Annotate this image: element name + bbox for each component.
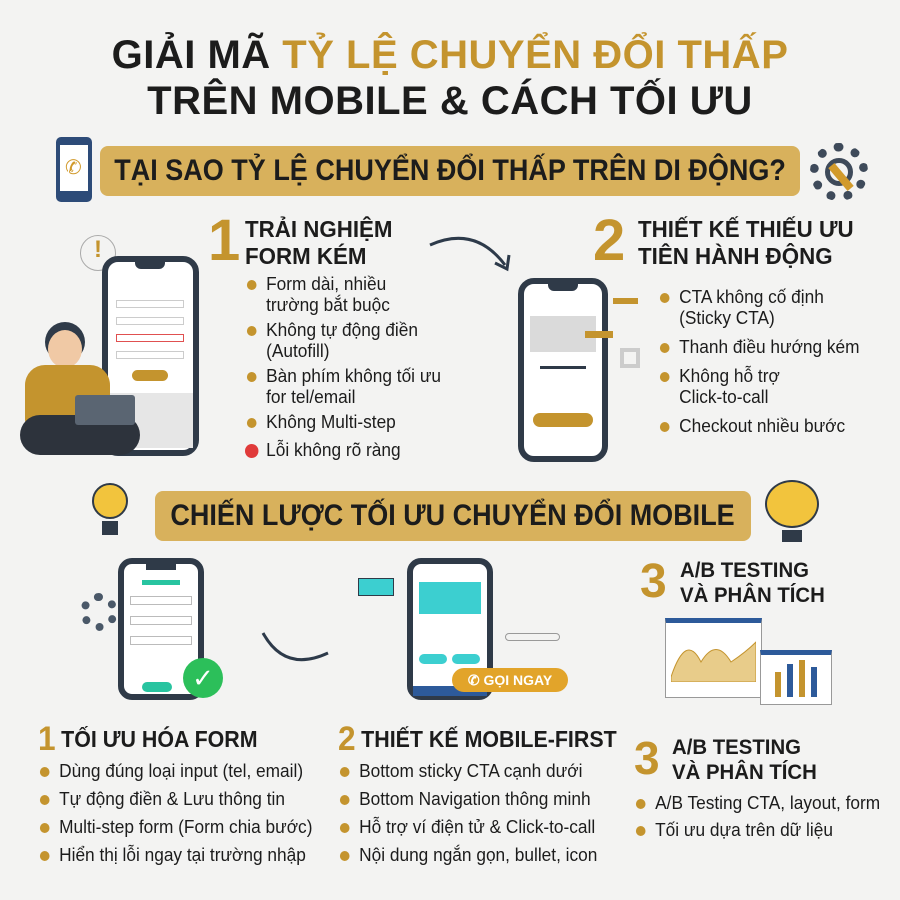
col1: form optimize [38,720,312,865]
list: form problems: Form dài, nhiều [266,274,386,294]
list: design problems: Checkout nhiều bước [679,416,845,436]
heading: A/B top: 3 [640,555,667,608]
col1: form optimize: 1TỐI ƯU HÓA FORM [38,720,258,758]
arrow [262,632,329,662]
section 2 heading: THIẾT KẾ THIẾU ƯU [638,216,854,242]
list: form problems: Không Multi-step [266,412,396,432]
section 1 heading: FORM KÉM [245,243,366,269]
section 2 heading: TIÊN HÀNH ĐỘNG [638,243,833,269]
illustration: phone with arrows [518,278,640,462]
banner: strategy: CHIẾN LƯỢC TỐI ƯU CHUYỂN ĐỔI MOBILE [171,499,735,532]
col2: mobile-first: 2THIẾT KẾ MOBILE-FIRST [338,720,617,758]
banner: why: TẠI SAO TỶ LỆ CHUYỂN ĐỔI THẤP TRÊN DI ĐỘNG? [114,154,786,187]
col3: A/B testing: A/B TESTING [672,736,801,759]
list: design problems: (Sticky CTA) [679,308,775,328]
icon: gear [810,143,868,201]
heading: A/B top [640,555,825,608]
col3: A/B testing: VÀ PHÂN TÍCH [672,761,817,784]
col3: A/B testing: Tối ưu dựa trên dữ liệu [655,820,833,840]
list: form problems: Bàn phím không tối ưu [266,366,441,386]
section 1 heading: TRẢI NGHIỆM [245,216,393,242]
title: GIẢI MÃ TỶ LỆ CHUYỂN ĐỔI THẤP [112,33,788,77]
arrow: curved [429,236,510,272]
icon: bulb right [765,480,819,542]
col1: form optimize: Tự động điền & Lưu thông tin [59,789,285,809]
col1: form optimize: Multi-step form (Form chia bước) [59,817,312,837]
col2: mobile-first: Bottom Navigation thông minh [359,789,591,809]
banner: why [100,146,800,196]
section 2 heading [593,208,854,273]
heading: A/B top: A/B TESTING [680,559,809,582]
icon: bulb left [92,483,128,535]
col2: mobile-first [338,720,617,865]
chart: dashboards [665,618,832,705]
illustration: mobile-first phone with call button: ✆ GỌI NGAY [468,672,552,688]
list: form problems: for tel/email [266,387,355,407]
col1: form optimize: Hiển thị lỗi ngay tại trường nhập [59,845,306,865]
heading: A/B top: VÀ PHÂN TÍCH [680,584,825,607]
illustration: phone form & person: ! [94,236,102,263]
title [112,32,788,123]
list: form problems: trường bắt buộc [266,295,390,315]
list: design problems: Không hỗ trợ [679,366,780,386]
col3: A/B testing: A/B Testing CTA, layout, form [655,793,880,813]
section 1 heading [208,208,393,273]
illustration: form phone: ✓ [192,663,214,693]
list: design problems: CTA không cố định [679,287,824,307]
col3: A/B testing: 3 [634,732,660,784]
list: form problems: Không tự động điền [266,320,418,340]
illustration: phone form & person [20,235,199,456]
icon: phone [56,137,92,202]
col2: mobile-first: Hỗ trợ ví điện tử & Click-to-call [359,817,595,837]
section 2 heading: 2 [593,208,625,273]
icon: phone: ✆ [65,157,82,179]
title: TRÊN MOBILE & CÁCH TỐI ƯU [147,79,753,123]
illustration: mobile-first phone with call button [358,558,568,700]
col3: A/B testing [634,732,880,840]
list: design problems [660,287,860,436]
section 1 heading: 1 [208,208,240,273]
banner: strategy [155,491,751,541]
list: form problems: (Autofill) [266,341,329,361]
list: design problems: Thanh điều hướng kém [679,337,860,357]
list: design problems: Click-to-call [679,387,768,407]
col2: mobile-first: Nội dung ngắn gọn, bullet, icon [359,845,597,865]
col1: form optimize: Dùng đúng loại input (tel, email) [59,761,303,781]
col2: mobile-first: Bottom sticky CTA cạnh dưới [359,761,582,781]
list: form problems: Lỗi không rõ ràng [266,440,401,460]
illustration: form phone [82,558,223,700]
list: form problems [245,274,441,460]
